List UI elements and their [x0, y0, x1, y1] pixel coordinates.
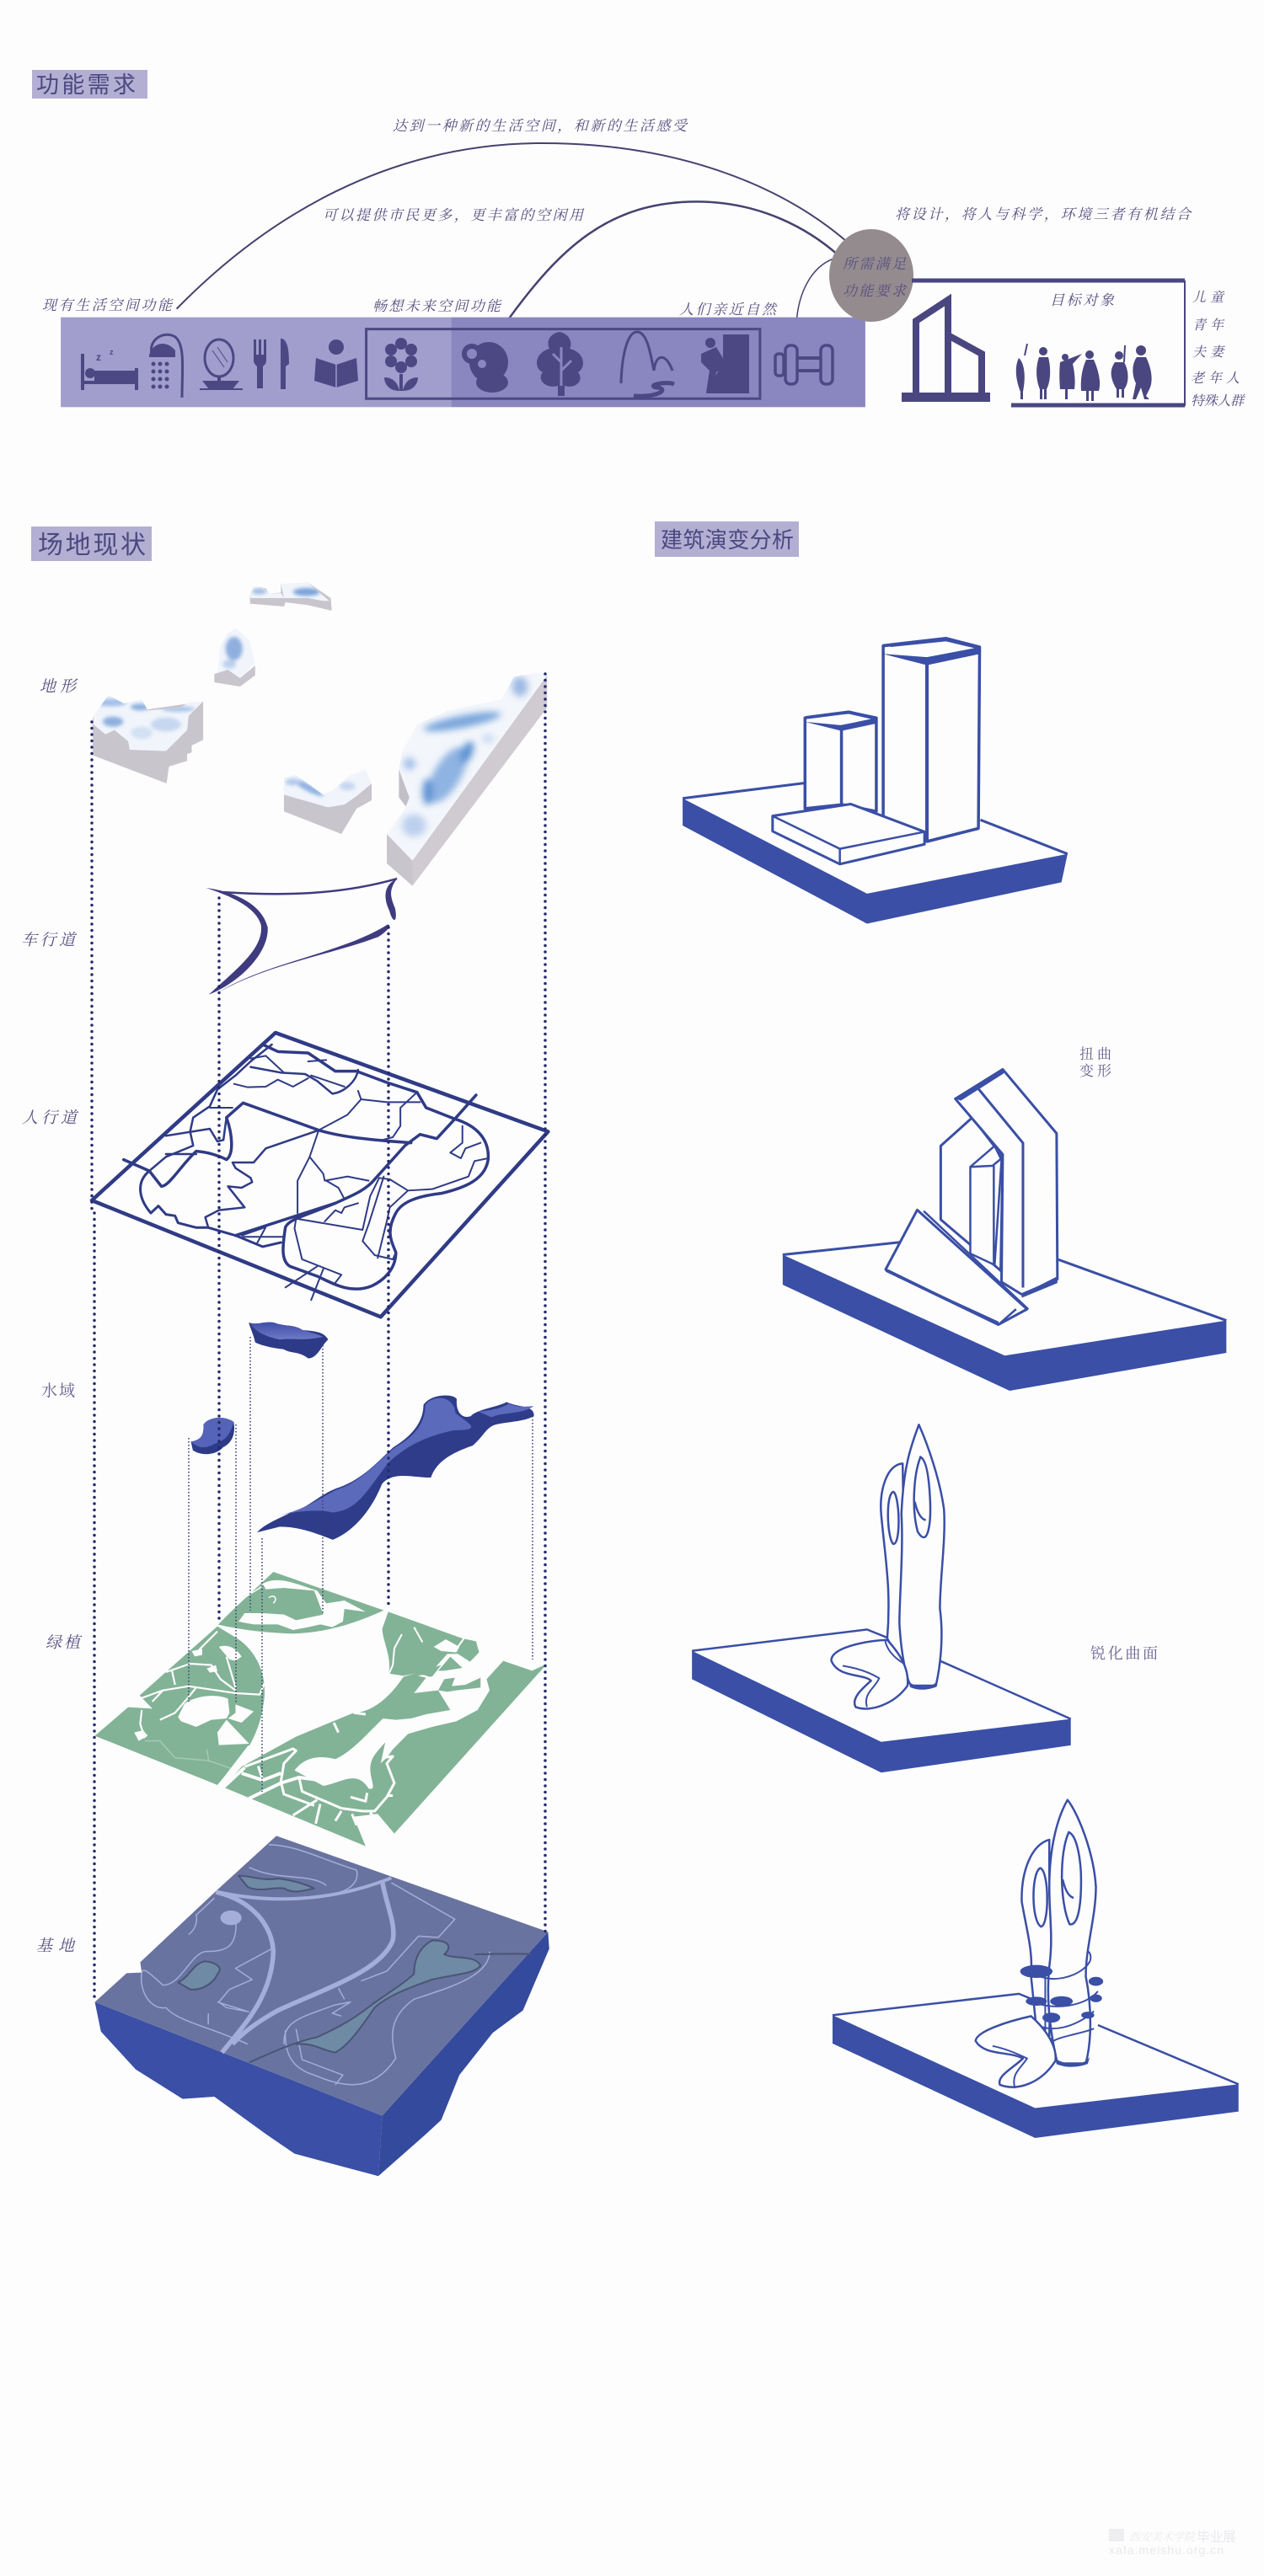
- water piece: small: [191, 1418, 234, 1454]
- model 3: sharpened curved form: [692, 1424, 1071, 1772]
- icon: flower: [384, 338, 418, 391]
- layer: site base: [95, 1836, 549, 2176]
- list: audience groups: 青年: [1192, 318, 1225, 333]
- icon: fountain: [621, 332, 674, 396]
- icon: balloons: [462, 342, 508, 393]
- watermark: xafa.meishu.org.cn: [1109, 2543, 1224, 2557]
- icon: climber on wall: [701, 334, 749, 393]
- label: integrate design: 将设计，将人与科学，环境三者有机结合: [895, 206, 1192, 222]
- layer: roads: [206, 879, 397, 995]
- icon: tree: [537, 332, 583, 396]
- model 4: sharpened form with rings: [833, 1800, 1239, 2138]
- heading: building evolution analysis: 建筑演变分析: [661, 527, 794, 553]
- label: carriageway: 车行道: [21, 932, 78, 949]
- label: twist deform: [1079, 1046, 1111, 1079]
- label: footpath: 人行道: [22, 1109, 79, 1127]
- panel: building evolution analysis: [655, 521, 1239, 2138]
- watermark: 毕业展: [1197, 2530, 1236, 2545]
- greenery: top wedge: [217, 1572, 383, 1633]
- watermark: [1109, 2528, 1236, 2557]
- label: terrain: 地形: [40, 678, 78, 696]
- label: greenery: 绿植: [46, 1634, 83, 1652]
- terrain piece: middle: [284, 770, 372, 834]
- label: target audience: 目标对象: [1050, 292, 1115, 308]
- heading: function requirements: 功能需求: [36, 72, 136, 98]
- dotted guide lines thin: [189, 1337, 533, 1792]
- layer: terrain: [90, 581, 550, 886]
- circle: required functions: 所需满足: [843, 256, 907, 272]
- layer: pedestrian paths: [92, 1033, 548, 1317]
- icon: building: [902, 300, 990, 402]
- circle: required functions: [829, 229, 913, 322]
- icon: bed: z: [96, 351, 101, 363]
- label: existing functions: 现有生活空间功能: [42, 297, 174, 313]
- terrain piece: large: [383, 671, 550, 886]
- greenery: right upper block: [383, 1611, 479, 1675]
- icon: bed: [81, 348, 138, 390]
- label: close to nature: 人们亲近自然: [679, 302, 778, 318]
- watermark: 西安美术学院: [1129, 2528, 1197, 2544]
- water piece: top: [249, 1323, 328, 1358]
- layer: greenery: [95, 1572, 547, 1846]
- list: audience groups: 夫妻: [1192, 345, 1225, 360]
- base top surface: [95, 1836, 548, 2116]
- base roads: [142, 1845, 490, 2085]
- list: audience groups: 儿童: [1192, 290, 1225, 305]
- model 1: block volumes: [683, 637, 1068, 923]
- list: audience groups: 老年人: [1191, 371, 1240, 386]
- heading: site status: 场地现状: [38, 532, 146, 559]
- icon: shower: [149, 334, 183, 398]
- layer: water: [191, 1323, 534, 1540]
- label: water: 水域: [41, 1382, 75, 1400]
- icon: group of people silhouettes: [1016, 344, 1152, 401]
- main dotted guide lines: [92, 674, 545, 2002]
- icon: bed: z: [110, 348, 114, 356]
- water piece: large: [257, 1396, 534, 1540]
- base water bodies: [178, 1876, 532, 2062]
- label: site base: 基地: [36, 1937, 76, 1955]
- label: sharpened surface: 锐化曲面: [1090, 1645, 1158, 1662]
- circle: required functions: 功能要求: [843, 283, 908, 299]
- target audience frame: [912, 281, 1185, 406]
- panel: function requirements: [32, 70, 1245, 409]
- label: imagined functions: 畅想未来空间功能: [372, 298, 502, 314]
- greenery: right lower block: [223, 1657, 547, 1846]
- arcs connecting functions to requirement circle: [177, 143, 847, 323]
- panel: site status: [21, 526, 550, 2176]
- list: audience groups: [1191, 290, 1245, 409]
- label: mid arc: 可以提供市民更多，更丰富的空闲用: [323, 207, 585, 223]
- base side faces: [95, 1932, 549, 2176]
- terrain piece: left: [90, 693, 206, 783]
- icon: dumbbell: [775, 345, 833, 384]
- label: twist deform: 扭曲: [1079, 1046, 1111, 1062]
- icon: person reading: [314, 339, 358, 387]
- icon: fork and knife: [254, 339, 289, 389]
- model 2: twisted volumes: [783, 1068, 1226, 1391]
- heading: building evolution analysis: [655, 521, 799, 557]
- terrain piece: small: [214, 628, 255, 687]
- icon: mirror and basin: [200, 339, 243, 390]
- greenery: left block: [95, 1627, 265, 1785]
- function band: [61, 318, 865, 407]
- terrain piece: top: [248, 581, 332, 611]
- list: audience groups: 特殊人群: [1191, 393, 1245, 409]
- label: long arc: 达到一种新的生活空间，和新的生活感受: [393, 118, 688, 134]
- label: twist deform: 变形: [1079, 1063, 1111, 1079]
